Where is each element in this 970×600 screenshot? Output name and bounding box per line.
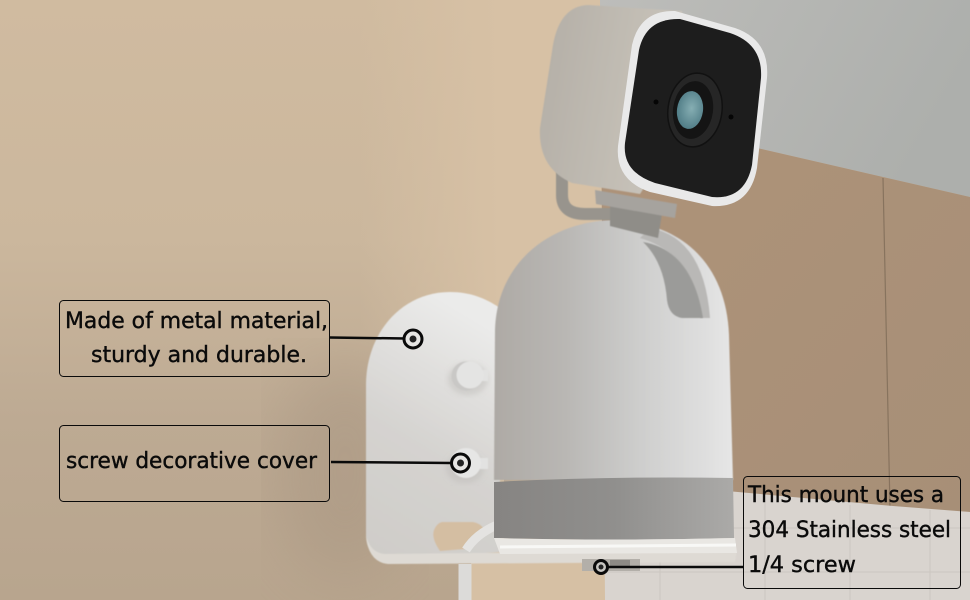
callout: screw decorative cover: screw decorative cover [66,449,318,474]
pointer: 1/4 screw [594,560,743,574]
cable slot [433,522,484,551]
power cable [465,525,497,600]
camera lens glass [674,89,706,131]
callout: metal material: sturdy and durable. [91,343,307,368]
background: wooden cabinet [601,110,970,512]
callout: metal material [60,300,330,376]
wall mount plate [366,292,737,564]
screw decorative cover: upper [448,362,488,395]
camera black front [625,19,761,197]
grey dome band [494,478,734,540]
dome cut-out slot [643,242,703,318]
callout: stainless steel screw: 1/4 screw [748,553,856,578]
pointer: metal material [330,330,422,348]
sensor dot right [728,114,734,120]
screw decorative cover: lower [446,448,488,483]
bottom 1/4 screw [582,559,640,571]
background: tiled splashback [604,480,970,600]
camera dome base [494,220,737,554]
dome cut-out rim [640,228,710,318]
background: cabinet groove [883,178,890,508]
camera lens housing [663,70,727,150]
pointer: screw cover [331,454,470,472]
callout: stainless steel screw: 304 Stainless steel [748,518,951,543]
white base ring [494,538,737,554]
mount shelf [366,535,737,564]
callout: screw decorative cover [60,426,330,502]
callout: stainless steel screw: This mount uses a [747,483,944,508]
callout: metal material: Made of metal material, [65,309,328,334]
background: grey ceiling [600,0,970,197]
wall background [0,0,620,600]
camera head [540,5,767,206]
callout: stainless steel screw [744,476,960,588]
sensor dot left [654,100,658,104]
camera side housing [540,5,700,194]
camera white face [618,11,767,206]
camera swivel bracket [562,172,677,238]
